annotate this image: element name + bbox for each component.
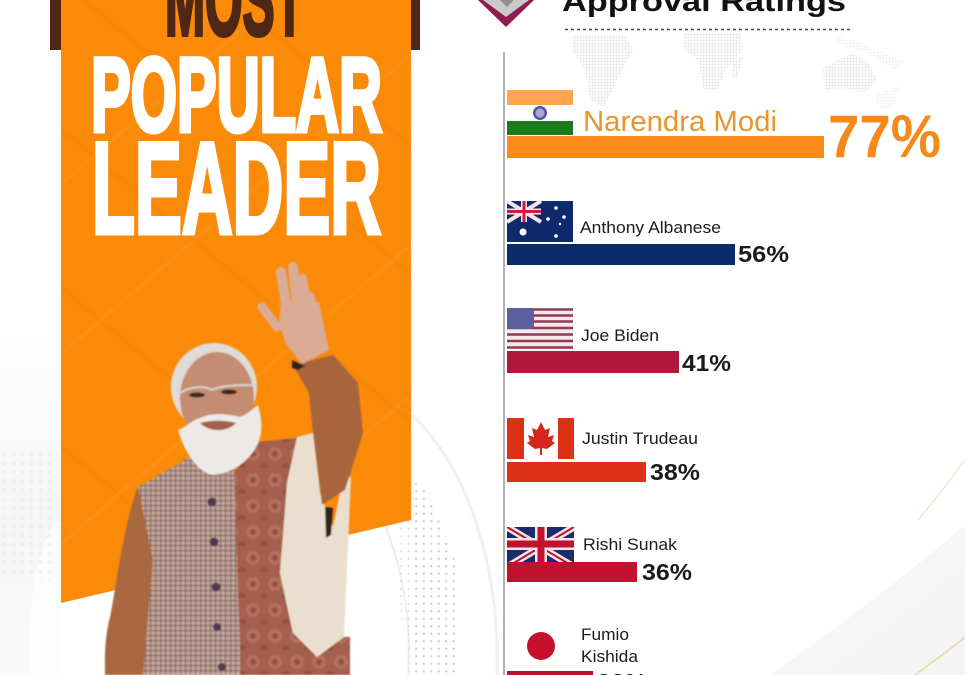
raised arm bbox=[293, 355, 363, 505]
cuff shadow bbox=[292, 360, 305, 370]
glasses and eyes bbox=[180, 385, 257, 398]
label: Rishi Sunak bbox=[583, 535, 678, 554]
banner ears bbox=[50, 0, 420, 50]
row: Japan: Kishida bbox=[581, 647, 639, 666]
row: United States bbox=[507, 308, 731, 376]
value: 56% bbox=[738, 241, 789, 267]
logo badge bbox=[478, 0, 534, 27]
label: Justin Trudeau bbox=[582, 429, 698, 448]
flag: India bbox=[507, 90, 573, 135]
bar bbox=[507, 562, 637, 582]
heading: leader: LEADER bbox=[92, 115, 381, 261]
label: Narendra Modi bbox=[583, 106, 777, 138]
label: Joe Biden bbox=[581, 326, 659, 345]
label: Anthony Albanese bbox=[580, 218, 721, 237]
cream stole bbox=[280, 433, 351, 657]
bar bbox=[507, 136, 824, 158]
flag: Australia bbox=[507, 201, 573, 242]
value: 41% bbox=[682, 350, 731, 376]
row: Canada bbox=[507, 418, 700, 485]
person waving bbox=[105, 267, 363, 675]
mouth bbox=[200, 421, 236, 430]
beard bbox=[178, 405, 261, 475]
bar bbox=[507, 244, 735, 265]
face bbox=[180, 352, 254, 444]
label: Fumio bbox=[581, 625, 629, 644]
value: 77% bbox=[828, 103, 941, 170]
bar bbox=[507, 351, 679, 373]
flag: Canada bbox=[507, 418, 574, 459]
flag: Japan bbox=[507, 623, 573, 668]
bar bbox=[507, 462, 646, 482]
value: 38% bbox=[650, 459, 700, 485]
row: United Kingdom bbox=[507, 527, 692, 585]
hair bbox=[171, 343, 257, 431]
dotted divider bbox=[565, 28, 850, 30]
buttons bbox=[208, 498, 226, 671]
flag: United States bbox=[507, 308, 573, 349]
row: Japan bbox=[507, 623, 647, 675]
shawl bbox=[234, 438, 350, 675]
flag: United Kingdom bbox=[507, 527, 574, 562]
left sleeve bbox=[105, 486, 153, 675]
row: India bbox=[507, 90, 941, 170]
chart axis bbox=[503, 52, 505, 675]
heading: popular: POPULAR bbox=[91, 37, 382, 154]
vest bbox=[138, 457, 241, 675]
orange banner bbox=[50, 0, 420, 603]
hand bbox=[262, 267, 329, 364]
value: 36% bbox=[642, 559, 692, 585]
bar bbox=[507, 671, 593, 675]
row: Australia bbox=[507, 201, 789, 267]
world map watermark bbox=[573, 33, 905, 110]
